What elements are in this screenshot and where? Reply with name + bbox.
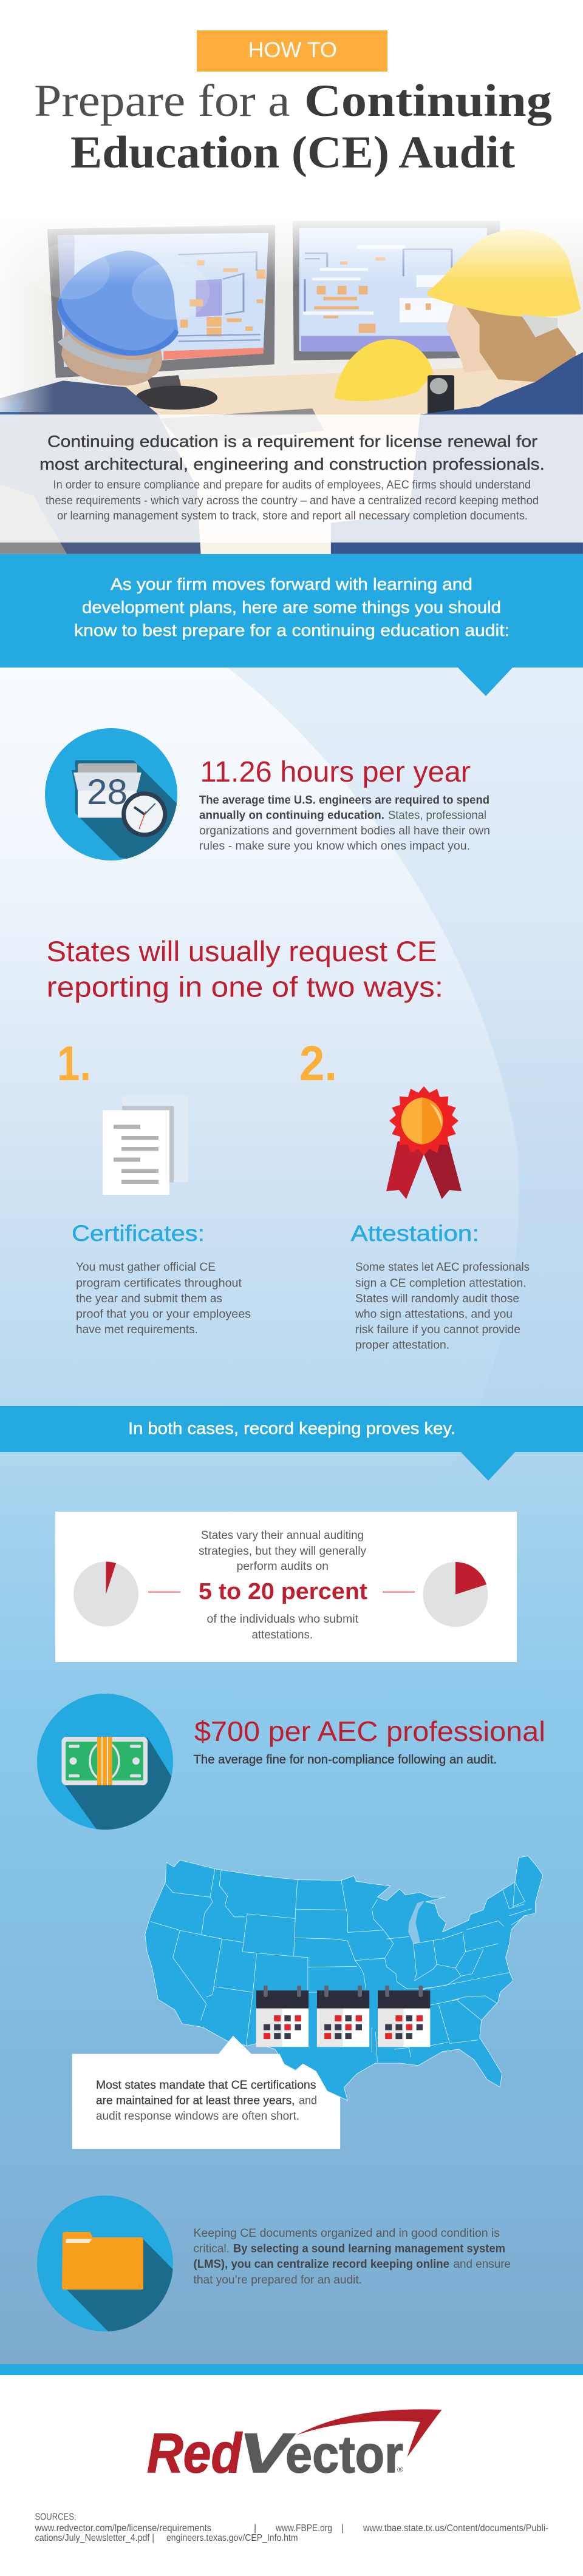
- column: certificates: proof that you or your employees: [76, 1308, 251, 1320]
- stat: 11.26 hours per year: rules - make sure you know which ones impact you.: [199, 840, 470, 853]
- icon: calendar and clock: 28: [87, 772, 128, 812]
- callout: record retention: and: [299, 2095, 317, 2107]
- chair: [0, 485, 67, 554]
- footer band: [0, 2364, 583, 2375]
- heading: two ways: [46, 935, 443, 1002]
- text: keeping documents organized: that you’re prepared for an audit.: [193, 2274, 362, 2287]
- stat: 700 dollar fine: $700 per AEC professional: [194, 1716, 545, 1747]
- panel: audit percentages: [55, 1512, 517, 1662]
- sources: |: [254, 2523, 256, 2534]
- banner: firm moves forward: know to best prepare for a continuing education audit:: [74, 621, 510, 640]
- banner: firm moves forward: As your firm moves forward with learning and: [111, 575, 472, 593]
- text: keeping documents organized: [193, 2227, 511, 2287]
- logo: RedVector: [147, 2409, 442, 2484]
- panel: intro overlay: [0, 414, 583, 543]
- icon: documents: [103, 1096, 188, 1195]
- column: attestation: Some states let AEC professionals: [355, 1261, 530, 1274]
- badge: HOW TO: HOW TO: [248, 38, 337, 62]
- logo: RedVector: ector: [285, 2426, 403, 2484]
- title: [34, 76, 552, 178]
- calendar 3: [378, 1986, 430, 2047]
- white highlights: [32, 243, 110, 299]
- intro body text: or learning management system to track, store and report all necessary completion documents.: [57, 510, 528, 522]
- yellow hard hat: [428, 229, 581, 317]
- keyboard: [160, 408, 324, 444]
- right monitor: [293, 221, 500, 360]
- callout: record retention: [72, 2036, 340, 2149]
- column: certificates: program certificates throughout: [76, 1277, 242, 1290]
- sources: www.tbae.state.tx.us/Content/documents/Publi-: [363, 2523, 548, 2534]
- column: certificates: You must gather official CE: [76, 1261, 216, 1274]
- column: attestation: Attestation:: [351, 1221, 479, 1246]
- small yellow hard hat: [335, 339, 433, 401]
- intro body text: [46, 479, 539, 522]
- stat: 11.26 hours per year: organizations and government bodies all have their own: [199, 825, 490, 837]
- icon: folder: [37, 2196, 176, 2342]
- column: attestation: who sign attestations, and you: [355, 1308, 513, 1320]
- column: attestation: States will randomly audit those: [355, 1293, 519, 1305]
- desk: [0, 363, 583, 444]
- column: certificates: have met requirements.: [76, 1323, 198, 1336]
- callout: record retention: audit response windows are often short.: [96, 2110, 299, 2123]
- audit text: attestations.: [251, 1629, 313, 1641]
- banner: record keeping: In both cases, record keeping proves key.: [128, 1419, 455, 1438]
- left monitor stand: [147, 375, 182, 393]
- intro heading: Continuing education is a requirement for license renewal for: [47, 432, 537, 450]
- intro body text: these requirements - which vary across the country – and have a centralized record keeping method: [46, 495, 539, 507]
- banner: record keeping: [0, 1406, 583, 1481]
- logo: RedVector: ®: [397, 2465, 403, 2474]
- neck and head: [61, 328, 162, 386]
- audit text: strategies, but they will generally: [199, 1545, 366, 1558]
- calendar 2: [317, 1986, 369, 2047]
- map: United States: [145, 1856, 543, 2100]
- intro heading: [39, 432, 545, 473]
- content background gradient: [0, 664, 583, 2367]
- right worker jacket: [331, 352, 583, 554]
- column: attestation: risk failure if you cannot provide: [355, 1323, 520, 1336]
- text: keeping documents organized: and ensure: [453, 2258, 511, 2271]
- stat: 700 dollar fine: [193, 1716, 545, 1766]
- banner: firm moves forward: [0, 554, 583, 696]
- logo: RedVector: Red: [147, 2422, 243, 2484]
- icon: award ribbon: [386, 1086, 462, 1199]
- column: attestation: [351, 1221, 530, 1352]
- text: keeping documents organized: By selecting a sound learning management system: [233, 2243, 505, 2255]
- stat: 11.26 hours per year: The average time U.S. engineers are required to spend: [199, 794, 489, 807]
- pie chart: 20 percent: [423, 1562, 488, 1627]
- audit text: States vary their annual auditing: [201, 1529, 364, 1542]
- heading: two ways: reporting in one of two ways:: [46, 971, 443, 1002]
- text: keeping documents organized: Keeping CE documents organized and in good condition is: [193, 2227, 500, 2240]
- icon: calendar and clock: [45, 728, 177, 868]
- logo: RedVector: V: [239, 2422, 295, 2484]
- audit text: 5 to 20 percent: [199, 1579, 367, 1604]
- text: keeping documents organized: (LMS), you can centralize record keeping online: [193, 2258, 449, 2271]
- column: certificates: Certificates:: [72, 1221, 205, 1246]
- column: attestation: proper attestation.: [355, 1339, 449, 1352]
- intro heading: most architectural, engineering and construction professionals.: [39, 455, 545, 473]
- intro body text: In order to ensure compliance and prepare for audits of employees, AEC firms should understand: [53, 479, 531, 492]
- sources: www.redvector.com/lpe/license/requirements: [35, 2523, 211, 2534]
- calendar 1: [256, 1986, 309, 2047]
- lamp: [428, 375, 454, 416]
- heading: two ways: States will usually request CE: [46, 935, 437, 967]
- badge: HOW TO: [197, 30, 387, 72]
- icon: three calendars: [256, 1986, 430, 2047]
- audit text: [199, 1529, 367, 1641]
- stat: 11.26 hours per year: annually on continuing education.: [199, 810, 384, 822]
- sources: SOURCES:: [35, 2512, 77, 2522]
- number 2: 2.: [299, 1036, 337, 1091]
- title: Education (CE) Audit: [70, 127, 515, 178]
- callout: record retention: Most states mandate that CE certifications: [96, 2079, 316, 2092]
- right worker face and hair: [446, 298, 528, 373]
- stat: 11.26 hours per year: States, professional: [388, 810, 486, 822]
- stat: 700 dollar fine: The average fine for non-compliance following an audit.: [193, 1753, 497, 1766]
- icon: money: [37, 1694, 176, 1839]
- banner: firm moves forward: development plans, here are some things you should: [82, 598, 501, 617]
- left monitor: [47, 225, 275, 378]
- callout: record retention: are maintained for at least three years,: [96, 2095, 295, 2107]
- pie chart: 5 percent: [73, 1561, 138, 1626]
- stat: 11.26 hours per year: [199, 756, 490, 853]
- number 1: 1.: [57, 1036, 91, 1091]
- column: attestation: sign a CE completion attestation.: [355, 1277, 526, 1290]
- audit text: perform audits on: [237, 1560, 329, 1573]
- title: Continuing: [304, 76, 552, 126]
- sources: www.FBPE.org: [275, 2523, 332, 2534]
- text: keeping documents organized: critical.: [193, 2243, 230, 2255]
- column: certificates: the year and submit them as: [76, 1293, 222, 1305]
- sources: |: [341, 2523, 344, 2534]
- sources: cations/July_Newsletter_4.pdf |: [35, 2533, 154, 2543]
- stat: 11.26 hours per year: 11.26 hours per year: [200, 756, 471, 788]
- audit text: of the individuals who submit: [206, 1613, 359, 1626]
- sources: [35, 2512, 548, 2543]
- photo: engineers at control monitors: [0, 218, 583, 554]
- sources: engineers.texas.gov/CEP_Info.htm: [166, 2533, 298, 2543]
- title: Prepare for a: [34, 76, 290, 126]
- blue hard hat: [58, 251, 179, 356]
- left worker shirt: [0, 380, 201, 554]
- column: certificates: [72, 1221, 251, 1336]
